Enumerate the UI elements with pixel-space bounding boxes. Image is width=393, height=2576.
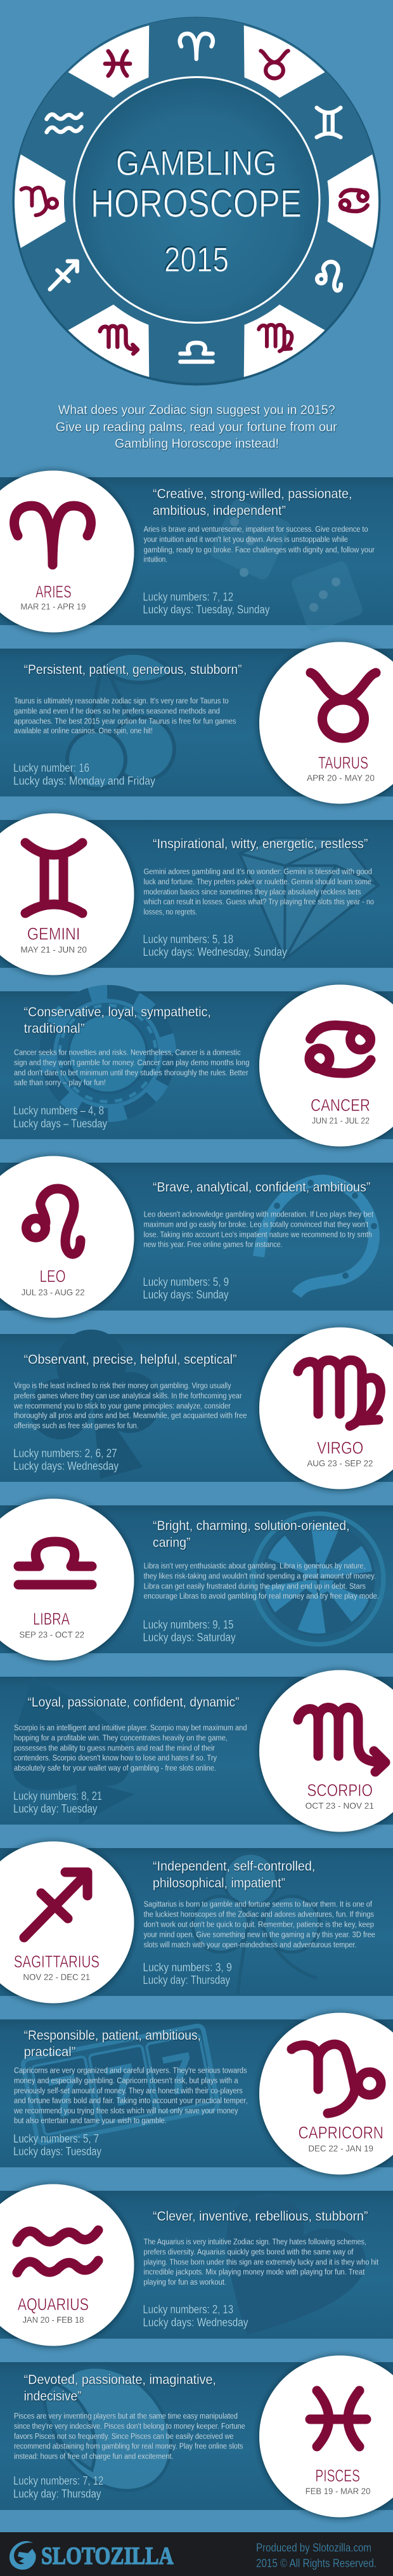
sign dates: FEB 19 - MAR 20: [306, 2486, 371, 2496]
quote heading: “Clever, inventive, rebellious, stubborn”: [153, 2209, 368, 2224]
description: safe than sorry – play for fun!: [14, 1078, 106, 1087]
lucky info: Lucky days: Monday and Friday: [13, 774, 155, 787]
description: available at online casinos. One spin, one hit!: [14, 725, 153, 735]
icon: taurus: [311, 673, 376, 738]
sign circle: [259, 642, 393, 803]
panel: pisces: [0, 2343, 393, 2517]
description: contenders. Scorpio doesn't know how to lose and hates if so. Try: [14, 1753, 217, 1762]
background: roulette wheel: [253, 1514, 383, 1644]
sign name: VIRGO: [317, 1439, 363, 1458]
wheel icon: aries: [180, 34, 213, 59]
sign dates: MAR 21 - APR 19: [20, 602, 86, 612]
sign circle: [0, 1156, 134, 1318]
sign dates: NOV 22 - DEC 21: [23, 1972, 90, 1982]
description: instead: hours of free of charge fun and excitement.: [14, 2451, 174, 2460]
lucky info: Lucky days: Tuesday: [13, 2145, 101, 2158]
panel: sagittarius: [0, 1842, 393, 2003]
quote heading: “Creative, strong-willed, passionate,: [153, 487, 352, 501]
lucky info: Lucky days: Tuesday, Sunday: [143, 604, 269, 616]
lucky info: Lucky numbers: 3, 9: [143, 1961, 232, 1974]
wheel icon: libra: [180, 343, 213, 362]
description: offerings such as free slot games for fun.: [14, 1421, 139, 1430]
lucky info: Lucky numbers: 8, 21: [13, 1790, 102, 1802]
panel: libra: [0, 1499, 393, 1660]
wheel icon: aquarius: [46, 114, 82, 132]
background: clover: [193, 1853, 319, 1994]
quote heading: philosophical, impatient”: [153, 1876, 285, 1891]
description: Scorpio is an intelligent and intuitive player. Scorpio may bet maximum and: [14, 1723, 247, 1733]
quote heading: “Bright, charming, solution-oriented,: [153, 1519, 350, 1533]
description: absolutely safe for your wallet way of gambling - free slots online.: [14, 1763, 216, 1773]
panel: scorpio: [0, 1670, 393, 1832]
description: [144, 524, 375, 564]
sign dates: SEP 23 - OCT 22: [19, 1630, 84, 1640]
description: new this year. Free online games for instance.: [144, 1239, 283, 1249]
panel: leo: [0, 1156, 393, 1318]
description: [144, 2237, 378, 2287]
sign circle: [259, 2356, 393, 2517]
description: [14, 1047, 249, 1087]
description: your intuition and it won't let you down. Aries is unstoppable while: [144, 534, 348, 544]
description: thoroughly all pros and cons and bet. Meanwhile, get acquainted with free: [14, 1411, 247, 1420]
chip wheel: [13, 17, 380, 386]
quote heading: [24, 2373, 216, 2404]
icon: libra: [18, 1542, 92, 1585]
description: previously self-set amount of money. They are honest with their co-players: [14, 2086, 243, 2096]
wheel icon: pisces: [105, 51, 130, 76]
intro text: Give up reading palms, read your fortune from our: [56, 419, 337, 434]
description: and fortune favors bold and fair. Taking into account your practical temper,: [14, 2096, 248, 2105]
icon: sagittarius: [24, 1872, 87, 1938]
sign circle: [0, 471, 134, 632]
sign dates: JUL 23 - AUG 22: [22, 1287, 85, 1297]
title: HOROSCOPE: [91, 182, 302, 225]
sign circle: [259, 1670, 393, 1832]
lucky info: [13, 1104, 107, 1130]
description: losses, no regrets.: [144, 907, 197, 916]
icon: capricorn: [292, 2044, 381, 2113]
quote heading: caring”: [153, 1536, 190, 1550]
sign circle: [0, 814, 134, 975]
sign dates: AUG 23 - SEP 22: [307, 1458, 373, 1469]
wheel icon: gemini: [317, 108, 340, 137]
description: Cancer seeks for novelties and risks. Nevertheless, Cancer is a domestic: [14, 1047, 241, 1057]
quote heading: practical”: [24, 2045, 75, 2059]
background: slot machine 777: [22, 2025, 219, 2144]
title: 2015: [164, 240, 229, 279]
description: [144, 1561, 379, 1601]
sign name: SCORPIO: [307, 1781, 373, 1800]
background: spade: [11, 1677, 134, 1824]
lucky info: Lucky numbers: 5, 7: [13, 2132, 99, 2145]
quote heading: “Inspirational, witty, energetic, restless”: [153, 837, 368, 852]
lucky info: Lucky day: Thursday: [13, 2488, 101, 2500]
logo wordmark: SLOTOZILLA: [41, 2542, 174, 2570]
description: since they're very indecisive. Pisces don't belong to money keeper. Fortune: [14, 2421, 245, 2431]
credits: [256, 2541, 377, 2570]
lucky info: Lucky days – Tuesday: [13, 1118, 107, 1130]
quote heading: “Devoted, passionate, imaginative,: [24, 2373, 216, 2388]
description: [144, 1210, 373, 1249]
sign name: GEMINI: [27, 925, 81, 944]
description: Pisces are very inventing players but at the same time easy manipulated: [14, 2411, 238, 2421]
description: we recommend you trying free slots which will not only save your money: [13, 2106, 238, 2115]
sign circle: [259, 1328, 393, 1489]
description: [13, 2066, 248, 2125]
lucky info: Lucky numbers – 4, 8: [13, 1104, 104, 1117]
title: GAMBLING: [116, 143, 277, 183]
quote heading: “Observant, precise, helpful, sceptical”: [24, 1352, 237, 1367]
background: horseshoe: [259, 1180, 377, 1295]
quote heading: “Persistent, patient, generous, stubborn”: [24, 663, 242, 677]
quote heading: [153, 487, 352, 519]
sign name: AQUARIUS: [18, 2295, 89, 2314]
icon: aquarius: [17, 2230, 98, 2273]
panel: cancer: [0, 985, 393, 1146]
icon: scorpio: [298, 1707, 385, 1772]
sign dates: MAY 21 - JUN 20: [20, 944, 87, 954]
lucky info: Lucky numbers: 7, 12: [13, 2474, 103, 2487]
lucky info: Lucky days: Sunday: [143, 1288, 229, 1301]
lucky info: [143, 591, 269, 616]
description: sign and they won't gamble for money. Cancer can play demo months long: [14, 1057, 249, 1067]
wheel icon: scorpio: [100, 326, 138, 353]
sign circle: [0, 1499, 134, 1660]
sign dates: DEC 22 - JAN 19: [308, 2143, 373, 2153]
description: recommend abstaining from gambling for real money. Play free online slots: [14, 2441, 243, 2450]
logo emblem: dragon: [10, 2541, 36, 2570]
lucky info: Lucky numbers: 7, 12: [143, 591, 233, 604]
background: dice: [209, 498, 364, 633]
description: Virgo is the least inclined to risk their money on gambling. Virgo usually: [14, 1380, 231, 1390]
intro text: What does your Zodiac sign suggest you in 2015?: [58, 403, 335, 418]
quote heading: indecisive”: [24, 2389, 82, 2404]
sign name: LEO: [39, 1267, 66, 1286]
icon: aries: [15, 506, 91, 565]
lucky info: Lucky days: Wednesday: [13, 1460, 119, 1472]
sign name: LIBRA: [33, 1609, 70, 1628]
lucky info: [143, 2303, 248, 2329]
description: [14, 2411, 245, 2460]
wheel icon: sagittarius: [50, 261, 77, 289]
panel: gemini: [0, 814, 393, 975]
lucky info: [13, 1790, 102, 1815]
lucky info: Lucky day: Tuesday: [13, 1802, 97, 1815]
background: club: [30, 1330, 160, 1479]
sign dates: OCT 23 - NOV 21: [306, 1800, 374, 1811]
icon: virgo: [298, 1360, 380, 1426]
background: casino chip: [39, 985, 176, 1122]
description: [13, 1380, 247, 1430]
wheel icon: capricorn: [22, 188, 57, 215]
lucky info: [13, 2132, 101, 2158]
background: lemon: [27, 2343, 195, 2514]
description: [143, 867, 374, 916]
lucky info: Lucky days: Wednesday: [143, 2316, 248, 2329]
lucky info: Lucky numbers: 5, 9: [143, 1276, 229, 1288]
lucky info: [143, 1961, 232, 1986]
description: but also entertain and tame your wish to gamble.: [14, 2115, 167, 2125]
description: prefers games where they can use analytical skills. In the forthcoming year: [14, 1390, 242, 1400]
wheel icon: virgo: [259, 325, 292, 351]
lucky info: Lucky numbers: 5, 18: [143, 933, 233, 946]
panel: aquarius: [0, 2184, 393, 2346]
lucky info: Lucky days: Saturday: [143, 1631, 236, 1644]
lucky info: Lucky numbers: 9, 15: [143, 1618, 233, 1631]
background: heart: [226, 2193, 366, 2335]
sign name: PISCES: [315, 2466, 360, 2485]
description: approaches. The best 2015 year option for Taurus is free for fun games: [14, 716, 236, 725]
sign circle: [259, 985, 393, 1146]
background: slot machine 777: 7: [43, 2063, 86, 2131]
quote heading: “Independent, self-controlled,: [153, 1859, 315, 1874]
sign dates: APR 20 - MAY 20: [307, 773, 375, 783]
inner ring and medallion: [74, 77, 319, 322]
lucky info: [13, 762, 155, 787]
sign name: ARIES: [35, 583, 72, 602]
quote heading: traditional”: [24, 1022, 85, 1036]
background: diamond: [240, 838, 378, 960]
icon: pisces: [310, 2391, 366, 2447]
lucky info: Lucky days: Wednesday, Sunday: [143, 946, 287, 958]
title: [91, 143, 302, 279]
quote heading: “Loyal, passionate, confident, dynamic”: [28, 1695, 240, 1710]
wheel icon: leo: [317, 261, 341, 291]
icon: leo: [27, 1189, 81, 1254]
description: playing for fun as workout.: [144, 2277, 226, 2287]
quote heading: [153, 1859, 315, 1891]
panel: aries: [0, 471, 393, 633]
quote heading: “Brave, analytical, confident, ambitious”: [153, 1180, 370, 1195]
description: Capricorns are very organized and careful players. They're serious towards: [14, 2066, 247, 2075]
quote heading: “Conservative, loyal, sympathetic,: [24, 1005, 211, 1020]
quote heading: [24, 1005, 211, 1036]
sign dates: JAN 20 - FEB 18: [23, 2315, 84, 2325]
description: [14, 696, 236, 735]
lucky info: [143, 933, 287, 958]
lucky info: [143, 1276, 229, 1301]
lucky info: Lucky day: Thursday: [143, 1974, 230, 1986]
icon: cancer: [309, 1025, 371, 1073]
quote heading: ambitious, independent”: [153, 504, 286, 519]
footer: [0, 2532, 393, 2576]
description: [144, 1899, 375, 1949]
background: cherries: [67, 653, 174, 789]
description: prefers diversity. Aquarius quickly gets bored with the same way of: [144, 2247, 354, 2257]
description: hopping for a profitable win. They concentrates heavily on the game,: [14, 1733, 228, 1743]
description: intuition.: [144, 555, 167, 564]
sign name: TAURUS: [318, 753, 368, 772]
icon: gemini: [25, 843, 82, 913]
description: and don't dare to bet minimum until they studies thoroughly the rules. Better: [14, 1067, 248, 1077]
sign circle: [259, 2013, 393, 2174]
wheel icon: cancer: [340, 190, 368, 211]
panel: virgo: [0, 1328, 393, 1489]
description: gamble and even if he does so he prefers seasoned methods and: [14, 706, 220, 715]
wheel icon: taurus: [261, 51, 288, 78]
background: slot machine 777: 7: [100, 2052, 143, 2120]
quote heading: [153, 1519, 350, 1550]
sign circle: [0, 2184, 134, 2346]
intro text: Gambling Horoscope instead!: [115, 436, 279, 451]
description: possesses the ability to guess numbers and read the mind of their: [14, 1743, 216, 1753]
sign dates: JUN 21 - JUL 22: [312, 1116, 370, 1126]
sign name: SAGITTARIUS: [14, 1952, 100, 1971]
quote heading: [24, 2028, 201, 2059]
sign circle: [0, 1842, 134, 2003]
intro text: [56, 403, 337, 451]
description: slots will match with your open-mindedness and adventurous temper.: [144, 1939, 357, 1949]
lucky info: Lucky number: 16: [13, 762, 89, 774]
description: money and especially gambling. Capricorn doesn't risk, but plays with a: [14, 2076, 238, 2085]
description: Taurus is ultimately reasonable zodiac sign. It's very rare for Taurus to: [14, 696, 229, 705]
description: we recommend you to stick to your game principles: analyze, consider: [13, 1401, 231, 1410]
lucky info: [13, 2474, 103, 2500]
quote heading: “Responsible, patient, ambitious,: [24, 2028, 201, 2043]
background: slot machine 777: 7: [158, 2040, 201, 2109]
description: [14, 1723, 247, 1773]
panel: taurus: [0, 642, 393, 803]
panel: capricorn: [0, 2013, 393, 2174]
lucky info: [143, 1618, 236, 1644]
sign name: CANCER: [311, 1096, 370, 1115]
lucky info: Lucky numbers: 2, 13: [143, 2303, 233, 2316]
lucky info: [13, 1447, 119, 1472]
description: favors Pisces not so frequently. Since Pisces can be easily deceived we: [14, 2431, 233, 2441]
lucky info: Lucky numbers: 2, 6, 27: [13, 1447, 117, 1460]
